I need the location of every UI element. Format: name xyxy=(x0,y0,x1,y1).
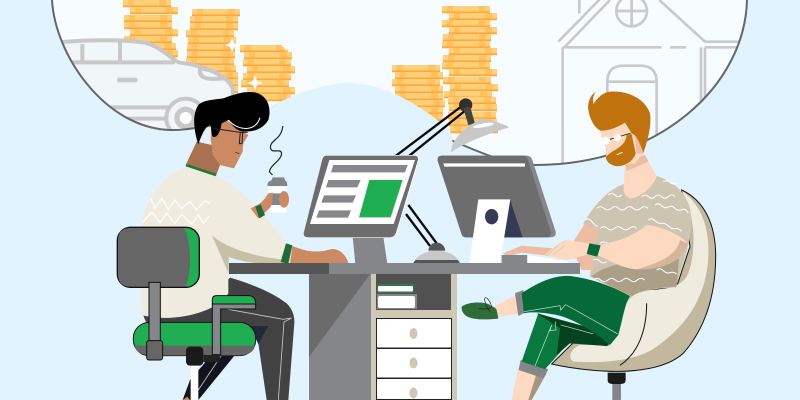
collar xyxy=(186,165,216,175)
sleeve cuff xyxy=(281,243,292,264)
desk cabinet xyxy=(309,273,457,400)
glasses xyxy=(213,128,248,144)
steam xyxy=(270,126,283,175)
wrist cuff xyxy=(255,204,265,218)
hair xyxy=(588,91,650,153)
background mound xyxy=(200,83,510,400)
desk top xyxy=(229,263,580,274)
thought bubble xyxy=(52,0,747,165)
lamp base xyxy=(413,251,460,263)
chair base xyxy=(191,365,198,400)
screen xyxy=(310,160,415,224)
ankle and shoe xyxy=(493,295,522,317)
shirt xyxy=(583,176,691,297)
monitor stand xyxy=(469,199,510,263)
car outline xyxy=(62,38,235,129)
lower leg xyxy=(512,367,547,400)
hair xyxy=(194,92,270,144)
sweater xyxy=(141,166,349,318)
front arm xyxy=(545,225,687,269)
egg chair right xyxy=(552,190,716,400)
books xyxy=(377,284,417,309)
pedestal xyxy=(309,273,372,400)
wristband xyxy=(587,243,601,257)
back post xyxy=(149,282,160,344)
frame xyxy=(371,273,457,400)
screen green block xyxy=(359,180,403,217)
neck xyxy=(624,155,657,198)
drawers xyxy=(376,318,452,400)
thought bubble outline xyxy=(52,0,747,165)
legs xyxy=(142,278,294,400)
forearm xyxy=(290,246,349,264)
lamp shade xyxy=(451,118,509,152)
house outline xyxy=(558,0,747,167)
lamp arms xyxy=(396,105,466,246)
chair left xyxy=(117,227,256,400)
person right xyxy=(462,91,691,400)
armrest xyxy=(212,296,256,304)
thigh xyxy=(522,276,630,345)
monitor back, right xyxy=(438,156,556,263)
head xyxy=(186,92,270,176)
back arm xyxy=(503,223,598,270)
coin stacks xyxy=(123,0,498,133)
lamp xyxy=(396,98,509,263)
drawer handles xyxy=(410,328,418,398)
beard xyxy=(606,134,636,166)
seat xyxy=(133,322,256,356)
shelf xyxy=(376,274,451,310)
monitor stand xyxy=(353,237,387,264)
person left xyxy=(141,92,349,400)
face xyxy=(600,122,645,165)
glasses xyxy=(602,137,610,145)
backrest xyxy=(117,227,199,287)
lamp joint xyxy=(459,98,472,112)
chair back xyxy=(552,190,716,371)
coffee cup xyxy=(251,177,289,219)
monitor, left xyxy=(303,155,419,264)
keyboard xyxy=(502,255,527,263)
